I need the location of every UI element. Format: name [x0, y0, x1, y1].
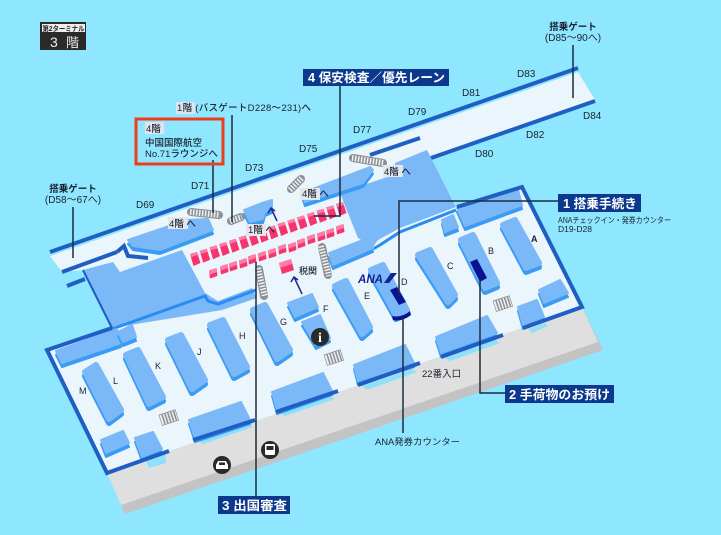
- stairs icons: [159, 296, 513, 425]
- floor badge: [40, 22, 86, 50]
- blocks: main hall: [56, 190, 568, 457]
- gate numbers: D84: [583, 111, 602, 122]
- ANA logo: ANA: [357, 274, 383, 286]
- gate numbers: D69: [136, 200, 155, 211]
- callout: immigration: 3 出国審査: [222, 498, 288, 513]
- check-in row letters: A: [531, 234, 538, 244]
- label: 1F bus gate: 1階 (バスゲートD228～231)へ: [177, 102, 311, 114]
- callout: China Airlines lounge: 4階: [146, 123, 161, 135]
- check-in row letters: [79, 234, 538, 396]
- floor direction labels: 1階 へ: [248, 224, 275, 236]
- callout: check-in: ANAチェックイン・発券カウンター: [558, 215, 671, 225]
- icon: taxi: [213, 456, 231, 474]
- blocks: pier: [128, 167, 373, 265]
- central blue blocks: [83, 150, 456, 329]
- floor direction labels: 4階 へ: [169, 218, 196, 230]
- callout: security: 4 保安検査／優先レーン: [308, 70, 445, 85]
- floor direction labels: [168, 165, 411, 276]
- label: gate east: [545, 21, 601, 44]
- glass strips under facade: [145, 323, 548, 468]
- gate numbers: D71: [191, 181, 210, 192]
- callout: baggage: [505, 385, 614, 403]
- gate numbers: [136, 69, 602, 211]
- icon: information: [311, 328, 329, 346]
- road pavement: [107, 307, 603, 514]
- check-in row letters: M: [79, 386, 86, 396]
- check-in row letters: K: [155, 361, 161, 371]
- callout: baggage: 2 手荷物のお預け: [509, 387, 610, 402]
- gate numbers: D81: [462, 88, 481, 99]
- floor badge: 第2ターミナル: [42, 24, 84, 33]
- label: gate west: [45, 183, 101, 206]
- security gates (pink): [190, 202, 346, 266]
- pier walls: [50, 68, 595, 286]
- label: gate east: (D85～90へ): [545, 33, 601, 44]
- check-in row letters: F: [323, 304, 329, 314]
- callout: check-in: [558, 194, 671, 234]
- immigration gates (pink): [209, 224, 344, 278]
- gate numbers: D82: [526, 130, 545, 141]
- gate numbers: D80: [475, 149, 494, 160]
- check-in row letters: E: [364, 291, 370, 301]
- check-in row letters: G: [280, 317, 287, 327]
- check-in row letters: B: [488, 246, 494, 256]
- check-in row letters: D: [401, 277, 408, 287]
- gate numbers: D77: [353, 125, 372, 136]
- check-in row letters: L: [113, 376, 118, 386]
- gate numbers: D75: [299, 144, 318, 155]
- callout: China Airlines lounge: 中国国際航空: [145, 137, 202, 149]
- escalators: [190, 158, 384, 297]
- callout: check-in: D19-D28: [558, 224, 592, 234]
- terminal floor: [47, 72, 595, 473]
- callout: China Airlines lounge: No.71ラウンジへ: [145, 149, 218, 160]
- floor badge: 階: [66, 35, 79, 50]
- ANA logo: [357, 273, 397, 286]
- check-in row letters: J: [197, 347, 202, 357]
- leader lines: [73, 45, 573, 497]
- label: gate west: 搭乗ゲート: [49, 183, 97, 195]
- icon: bus: [261, 441, 279, 459]
- callout: immigration: [218, 496, 290, 514]
- label: gate west: (D58～67へ): [45, 195, 101, 206]
- navy check-in counters: [390, 259, 487, 320]
- label: entrance 22: 22番入口: [422, 368, 461, 380]
- floor direction labels: 4階 へ: [302, 188, 329, 200]
- terminal outer walls: [47, 187, 582, 473]
- customs desk: [279, 259, 294, 274]
- floor direction labels: 税関: [299, 265, 317, 276]
- callout: China Airlines lounge: [136, 119, 223, 164]
- label: ANA ticket counter: ANA発券カウンター: [375, 436, 460, 447]
- gate numbers: D79: [408, 107, 427, 118]
- floor badge: 3: [50, 34, 58, 50]
- icon: information: i: [318, 331, 322, 346]
- arrows: [268, 208, 302, 294]
- check-in islands: [85, 220, 539, 419]
- check-in row letters: C: [447, 261, 454, 271]
- check-in row letters: H: [239, 331, 246, 341]
- label: gate east: 搭乗ゲート: [549, 21, 597, 33]
- gate numbers: D83: [517, 69, 536, 80]
- gate numbers: D73: [245, 163, 264, 174]
- callout: check-in: 1 搭乗手続き: [563, 196, 637, 211]
- floor direction labels: 4階 へ: [384, 166, 411, 178]
